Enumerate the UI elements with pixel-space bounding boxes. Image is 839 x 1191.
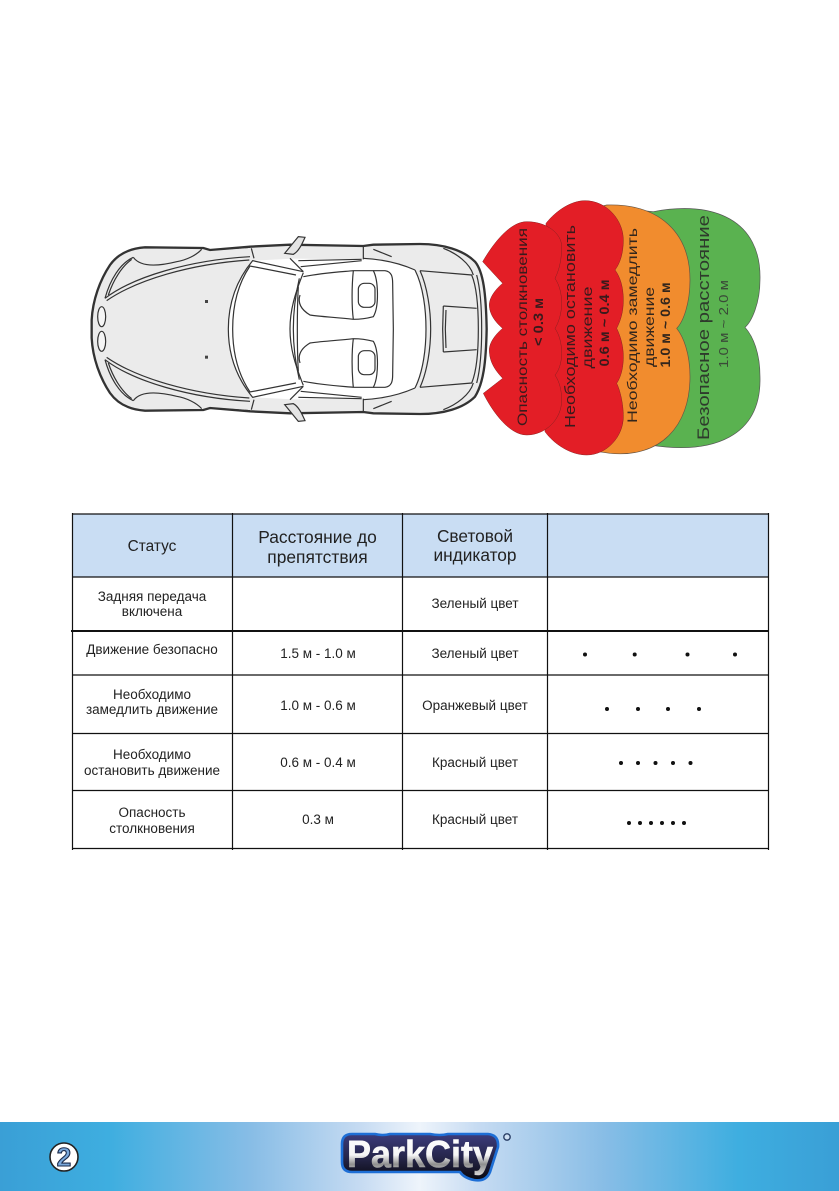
status table — [71, 513, 769, 850]
row: collision danger: столкновения — [109, 821, 195, 836]
row: collision danger: 0.3 м — [302, 812, 334, 827]
row: safe movement: 1.5 м - 1.0 м — [280, 646, 356, 661]
zone: collision danger — [483, 222, 562, 435]
row: reverse gear engaged: Зеленый цвет — [431, 596, 519, 611]
row: reverse gear engaged: включена — [122, 604, 183, 619]
table header: Статус — [128, 538, 177, 555]
logo ParkCity: ParkCity — [347, 1134, 493, 1176]
zone: slow down: Необходимо замедлить — [624, 228, 640, 423]
zone: slow down — [587, 205, 690, 454]
row: slow down: 1.0 м - 0.6 м — [280, 698, 356, 713]
row: stop: Красный цвет — [432, 755, 518, 770]
table grid — [71, 513, 769, 850]
zone: collision danger: < 0.3 м — [530, 298, 546, 346]
registered mark — [504, 1134, 510, 1140]
zone: stop: движение — [579, 286, 595, 368]
zone: collision danger: Опасность столкновения — [514, 228, 530, 426]
row: reverse gear engaged: Задняя передача — [98, 589, 207, 604]
table header: Световой — [437, 526, 513, 546]
zone: slow down: движение — [641, 287, 657, 367]
zone: safe distance: 1.0 м ~ 2.0 м — [716, 280, 731, 368]
page number — [50, 1142, 78, 1172]
page number: 2 — [57, 1142, 71, 1172]
row: slow down — [86, 687, 701, 717]
table header: препятствия — [267, 547, 368, 567]
row: safe movement: Зеленый цвет — [431, 646, 519, 661]
row: reverse gear engaged — [98, 589, 519, 619]
row: stop — [84, 747, 692, 778]
table header: Расстояние до — [258, 527, 377, 547]
footer band — [0, 1122, 839, 1191]
table header — [72, 514, 768, 577]
table header: индикатор — [433, 545, 517, 565]
row: stop: Необходимо — [113, 747, 191, 762]
row: stop: остановить движение — [84, 763, 220, 778]
parking sensor zones — [483, 201, 760, 455]
zone: stop: 0.6 м ~ 0.4 м — [596, 280, 612, 366]
car top view — [92, 237, 487, 421]
row: safe movement — [86, 642, 737, 661]
row: collision danger: Опасность — [118, 805, 186, 820]
row: slow down: Оранжевый цвет — [422, 698, 528, 713]
row: collision danger: Красный цвет — [432, 812, 518, 827]
row: slow down: замедлить движение — [86, 702, 218, 717]
zone: stop: Необходимо остановить — [563, 225, 579, 428]
row: collision danger — [109, 805, 686, 836]
row: stop: 0.6 м - 0.4 м — [280, 755, 356, 770]
row: safe movement: Движение безопасно — [86, 642, 218, 657]
zone: stop — [545, 201, 623, 455]
row: slow down: Необходимо — [113, 687, 191, 702]
zone: slow down: 1.0 м ~ 0.6 м — [657, 282, 673, 368]
zone: safe distance — [633, 208, 760, 448]
zone: safe distance: Безопасное расстояние — [694, 215, 713, 440]
